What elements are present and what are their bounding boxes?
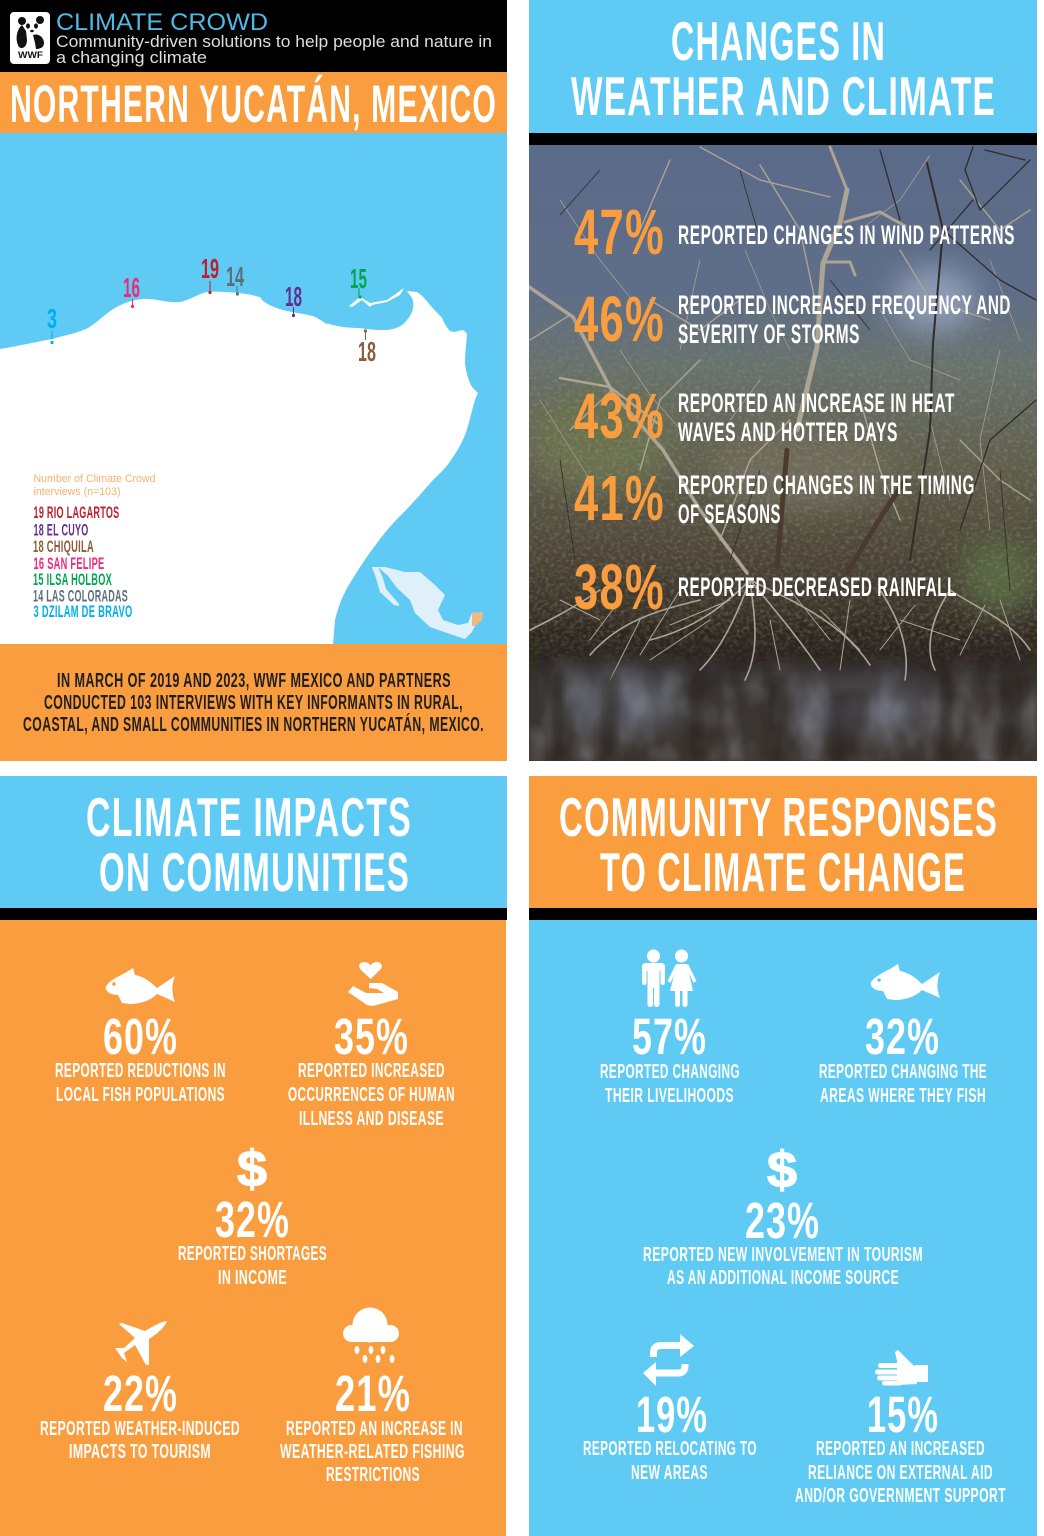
heading: changes in weather and climate: [529, 0, 1037, 133]
tagline: a changing climate: [56, 48, 207, 67]
legend: interview counts: 3 DZILAM DE BRAVO: [34, 603, 132, 621]
impact: fishing restrictions: WEATHER-RELATED FISHING: [280, 1440, 465, 1463]
stat: wind patterns: [574, 196, 1015, 268]
response: livelihoods: 57%: [632, 1008, 707, 1065]
icon: WWF panda logo: [10, 12, 50, 64]
photo: damaged mangrove trees: [529, 145, 1040, 761]
impact: fishing restrictions: RESTRICTIONS: [326, 1463, 420, 1486]
icon: rain cloud: [343, 1308, 399, 1363]
map marker: San Felipe: 16: [123, 272, 140, 303]
legend: interview counts: 19 RIO LAGARTOS: [34, 504, 120, 522]
intro text block: CONDUCTED 103 INTERVIEWS WITH KEY INFORMANTS IN RURAL,: [44, 692, 463, 714]
heading: climate impacts on communities: [0, 776, 507, 908]
legend: interview counts: 18 EL CUYO: [34, 522, 88, 540]
response: tourism income: 23%: [745, 1192, 820, 1249]
icon: fish: [106, 968, 175, 1004]
map marker: Isla Holbox: 15: [350, 263, 367, 294]
impact: illness and disease: REPORTED INCREASED: [298, 1059, 445, 1082]
legend: interview counts: 14 LAS COLORADAS: [33, 588, 128, 606]
response: livelihoods: [600, 950, 740, 1107]
icon: dollar sign: $: [767, 1141, 797, 1198]
response: fishing areas: [819, 964, 987, 1107]
stat: rainfall: [574, 551, 957, 623]
impact: tourism: [40, 1321, 240, 1463]
map marker: Chiquila: [358, 329, 376, 367]
legend: interview counts: 18 CHIQUILA: [33, 538, 94, 556]
tagline: Community-driven solutions to help people and nature in: [56, 32, 492, 51]
panel: map of northern Yucatan: [0, 133, 507, 644]
impact: fish populations: [55, 968, 226, 1106]
response: external aid: 15%: [867, 1386, 939, 1443]
response: livelihoods: THEIR LIVELIHOODS: [605, 1084, 734, 1107]
icon: exchange arrows: [643, 1334, 694, 1386]
legend: interview counts: [33, 473, 156, 621]
impact: fishing restrictions: 21%: [335, 1365, 411, 1422]
impact: income shortages: REPORTED SHORTAGES: [178, 1242, 327, 1265]
stat: seasons: OF SEASONS: [678, 499, 781, 529]
map marker: Rio Lagartos: 19: [201, 253, 219, 284]
stat: storms: 46%: [574, 283, 665, 355]
intro text block: IN MARCH OF 2019 AND 2023, WWF MEXICO AND PARTNERS: [57, 670, 451, 692]
stat: storms: [574, 283, 1011, 355]
map marker: El Cuyo: [285, 281, 302, 317]
stat: seasons: [574, 462, 975, 534]
stat: rainfall: 38%: [574, 551, 665, 623]
impact: fish populations: REPORTED REDUCTIONS IN: [55, 1059, 226, 1082]
heading: climate impacts on communities: ON COMMUNITIES: [99, 841, 410, 903]
header: Climate Crowd banner: [0, 0, 507, 72]
response: fishing areas: 32%: [865, 1008, 940, 1065]
title bar: Northern Yucatan: NORTHERN YUCATÁN, MEXICO: [10, 74, 497, 134]
light branches: [529, 147, 1030, 680]
heading: community responses: [529, 776, 1037, 908]
map marker: El Cuyo: 18: [285, 281, 302, 312]
response: relocation: REPORTED RELOCATING TO: [583, 1437, 757, 1460]
reflected trunks in the water: [552, 670, 1022, 761]
impact: tourism: REPORTED WEATHER-INDUCED: [40, 1417, 240, 1440]
impact: income shortages: [178, 1140, 327, 1289]
icon: hand holding heart: [348, 962, 398, 1006]
impact: fishing restrictions: REPORTED AN INCREASE IN: [286, 1417, 463, 1440]
map marker: Las Coloradas: 14: [226, 261, 244, 292]
impact: income shortages: IN INCOME: [218, 1266, 287, 1289]
land mass: [0, 291, 478, 644]
impact: illness and disease: [288, 962, 455, 1130]
map marker: Dzilam de Bravo: 3: [47, 303, 57, 334]
title bar: Northern Yucatan: [0, 72, 507, 134]
panel: community responses: [529, 920, 1037, 1536]
response: relocation: NEW AREAS: [631, 1461, 708, 1484]
panel: climate impacts: [0, 920, 506, 1536]
brand name: CLIMATE CROWD: [56, 9, 268, 36]
impact: tourism: 22%: [103, 1365, 178, 1422]
icon: WWF panda logo: WWF: [18, 50, 43, 61]
heading: changes in weather and climate: CHANGES IN: [671, 10, 886, 72]
stat: heat waves: WAVES AND HOTTER DAYS: [678, 417, 898, 447]
icon: dollar sign: $: [237, 1140, 267, 1197]
icon: man and woman: [642, 950, 696, 1007]
tagline: [56, 32, 492, 67]
icon: airplane: [115, 1321, 167, 1365]
stat: heat waves: 43%: [574, 380, 665, 452]
map marker: Las Coloradas: [226, 261, 244, 296]
icon: open hand: [875, 1350, 928, 1386]
legend: interview counts: interviews (n=103): [34, 486, 120, 498]
stat: seasons: 41%: [574, 462, 665, 534]
intro text block: [0, 644, 507, 761]
impact: tourism: IMPACTS TO TOURISM: [69, 1440, 211, 1463]
Holbox island: [349, 288, 404, 307]
intro text block: COASTAL, AND SMALL COMMUNITIES IN NORTHERN YUCATÁN, MEXICO.: [23, 713, 484, 736]
stat: storms: SEVERITY OF STORMS: [678, 319, 860, 349]
dark branches: [560, 147, 1036, 590]
map marker: Rio Lagartos: [201, 253, 219, 294]
legend: interview counts: 15 ILSA HOLBOX: [33, 571, 112, 589]
map marker: Chiquila: 18: [358, 336, 376, 367]
legend: interview counts: 16 SAN FELIPE: [34, 555, 104, 573]
stat: wind patterns: 47%: [574, 196, 665, 268]
legend: interview counts: Number of Climate Crowd: [34, 473, 156, 485]
response: tourism income: [643, 1141, 923, 1289]
response: relocation: 19%: [636, 1386, 708, 1443]
response: livelihoods: REPORTED CHANGING: [600, 1060, 740, 1083]
map marker: Dzilam de Bravo: [47, 303, 57, 344]
panel: mangrove photo with statistics: [529, 145, 1040, 761]
response: relocation: [583, 1334, 757, 1484]
icon: fish: [870, 964, 940, 1000]
impact: illness and disease: ILLNESS AND DISEASE: [299, 1107, 444, 1130]
mangrove roots: [530, 580, 1030, 680]
heading: climate impacts on communities: CLIMATE IMPACTS: [86, 786, 412, 848]
impact: fish populations: LOCAL FISH POPULATIONS: [56, 1083, 225, 1106]
map marker: Isla Holbox: [350, 263, 367, 299]
stat: heat waves: [574, 380, 955, 452]
impact: fish populations: 60%: [103, 1008, 178, 1065]
map marker: San Felipe: [123, 272, 140, 308]
impact: illness and disease: OCCURRENCES OF HUMAN: [288, 1083, 455, 1106]
impact: fishing restrictions: [280, 1308, 465, 1486]
impact: income shortages: 32%: [215, 1191, 290, 1248]
impact: illness and disease: 35%: [334, 1008, 409, 1065]
response: external aid: [795, 1350, 1006, 1507]
inset: map of Mexico: [372, 567, 483, 639]
